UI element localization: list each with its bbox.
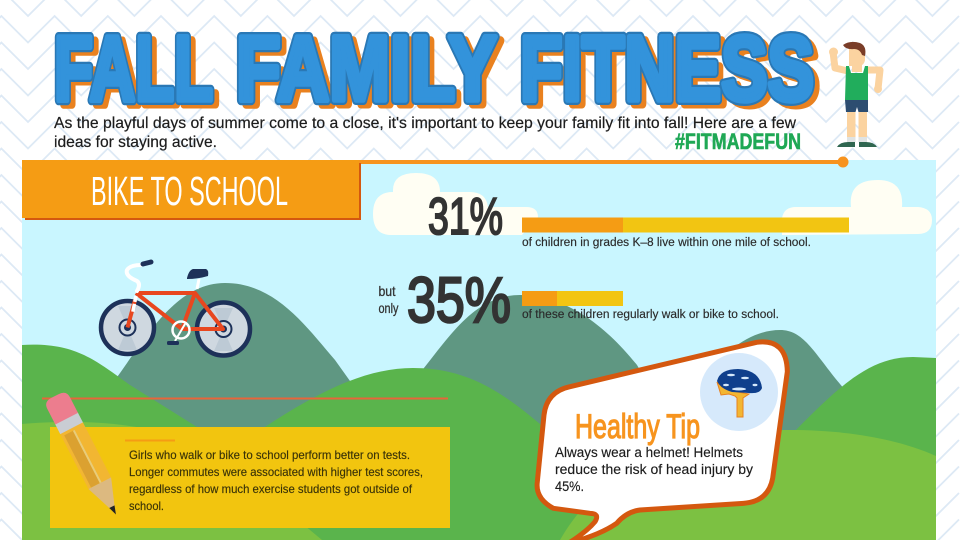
dark hills	[100, 283, 845, 440]
intro text	[54, 115, 796, 151]
bar: 35 percent	[522, 291, 623, 306]
tip box: girls test scores: school.	[129, 499, 164, 513]
stat: 31 percent: of children in grades K–8 live within one mile of school.	[522, 237, 811, 249]
red rule line	[42, 398, 448, 400]
icon: helmet	[700, 353, 778, 431]
icon: pencil	[44, 390, 127, 520]
cloud right	[782, 180, 932, 235]
stat: 35 percent: only	[378, 300, 398, 316]
bar: 31 percent	[522, 218, 849, 232]
orange divider line	[22, 156, 848, 168]
tip box: girls test scores: Longer commutes were associated with higher test scores,	[129, 465, 423, 479]
mid green hills	[22, 345, 936, 540]
tip text: reduce the risk of head injury by	[555, 462, 753, 477]
title: FITNESS	[520, 18, 814, 120]
stat: 35 percent: 35%	[407, 264, 511, 336]
tip text: Always wear a helmet! Helmets	[555, 445, 743, 460]
title: FALL	[59, 22, 218, 124]
banner: bike to school	[22, 160, 361, 220]
title: FAMILY	[241, 22, 502, 124]
tip box: girls test scores: Girls who walk or bike to school perform better on tests.	[129, 448, 410, 462]
heading: healthy tip: Healthy Tip	[575, 408, 700, 446]
banner: bike to school: BIKE TO SCHOOL	[91, 168, 288, 214]
stat: 35 percent: but	[378, 283, 396, 299]
title: FITNESS	[525, 22, 819, 124]
icon: bicycle	[101, 262, 250, 356]
icon: flexing man	[829, 42, 882, 147]
panel: bike to school scene	[22, 160, 936, 540]
stat: 31 percent: 31%	[428, 188, 503, 246]
title: FALL	[54, 18, 213, 120]
stat: 31 percent	[428, 188, 849, 249]
title: FALL	[54, 18, 213, 120]
hashtag: #FITMADEFUN	[675, 129, 801, 154]
cloud left	[373, 173, 538, 235]
title	[54, 18, 819, 124]
tip box: girls test scores	[50, 427, 450, 528]
tip box: girls test scores: regardless of how much exercise students got outside of	[129, 482, 413, 496]
title: FITNESS	[520, 18, 814, 120]
title: FAMILY	[236, 18, 497, 120]
title: FAMILY	[236, 18, 497, 120]
stat: 35 percent	[378, 264, 779, 336]
tip text	[555, 445, 753, 494]
intro text: As the playful days of summer come to a close, it's important to keep your family fit into fall! Here are a few	[54, 115, 796, 132]
intro text: ideas for staying active.	[54, 134, 217, 151]
light green foreground	[22, 422, 936, 540]
callout: healthy tip speech bubble	[537, 342, 787, 540]
tip text: 45%.	[555, 479, 584, 494]
stat: 35 percent: of these children regularly walk or bike to school.	[522, 309, 779, 321]
